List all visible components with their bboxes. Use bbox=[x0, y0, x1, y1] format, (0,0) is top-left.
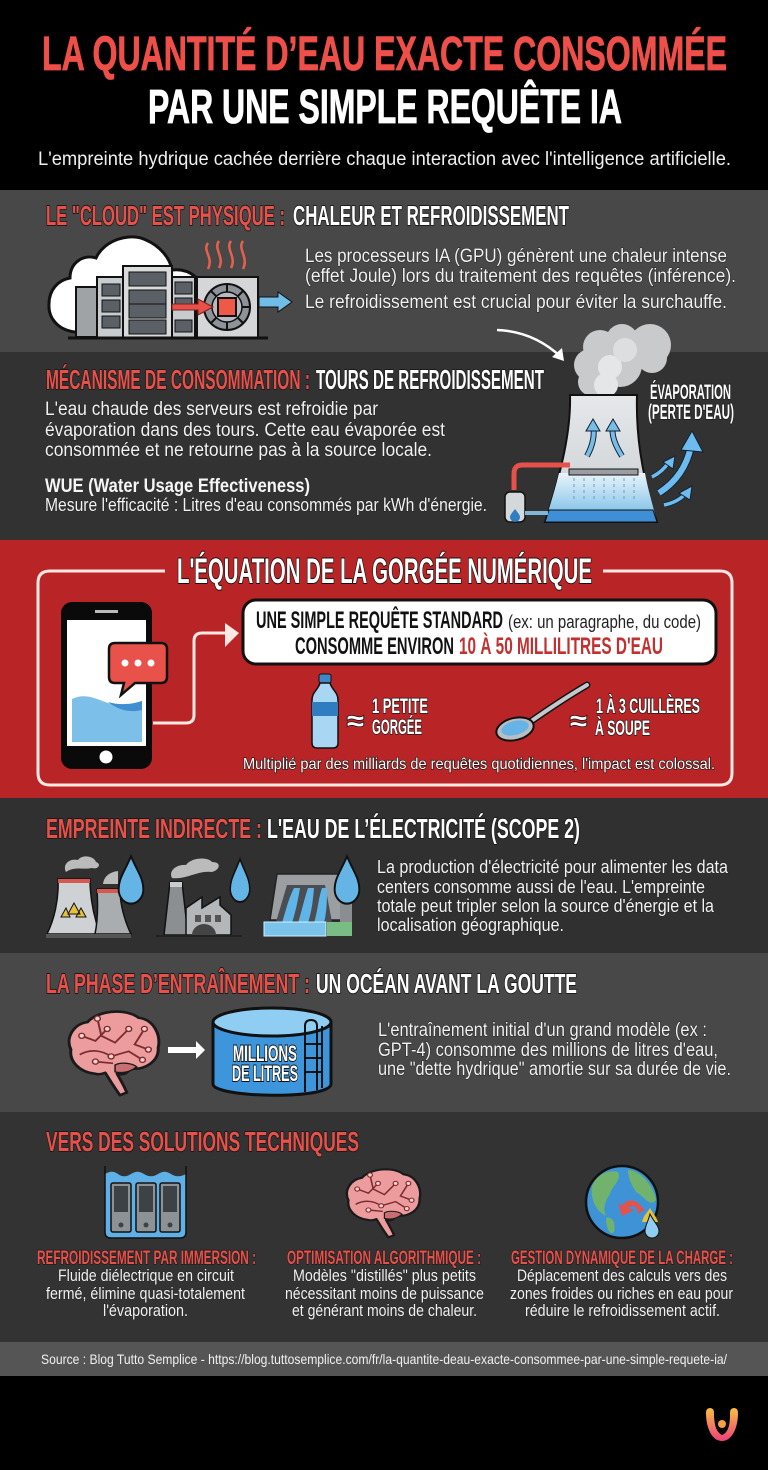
header bbox=[38, 27, 731, 170]
callout: requête standard: UNE SIMPLE REQUÊTE STANDARD bbox=[256, 606, 503, 634]
text: processeurs: (effet Joule) lors du traitement des requêtes (inférence). bbox=[305, 266, 736, 287]
updraft arrows bbox=[586, 419, 622, 456]
text: dette hydrique bbox=[378, 1020, 731, 1080]
callout: requête standard bbox=[243, 600, 716, 664]
heading: entraînement: UN OCÉAN AVANT LA GOUTTE bbox=[316, 968, 577, 999]
text: WUE bbox=[45, 476, 487, 515]
solution: immersion: l'évaporation. bbox=[103, 1301, 188, 1320]
arrow: serveurs vers tour bbox=[497, 330, 564, 361]
text: processeurs: Le refroidissement est crucial pour éviter la surchauffe. bbox=[305, 292, 727, 313]
text: processeurs: Les processeurs IA (GPU) génèrent une chaleur intense bbox=[305, 246, 727, 267]
icon: water tank bbox=[213, 1008, 331, 1095]
heading: empreinte: L'EAU DE L’ÉLECTRICITÉ (SCOPE 2) bbox=[267, 813, 580, 844]
icon: globe bbox=[586, 1166, 659, 1238]
text: production d'électricité: localisation géographique. bbox=[377, 915, 564, 935]
icon: water bottle bbox=[312, 674, 338, 748]
heading: empreinte: EMPREINTE INDIRECTE : bbox=[46, 813, 262, 844]
icon: smartphone bbox=[61, 602, 167, 769]
text: évaporation: consommée et ne retourne pas à la source locale. bbox=[45, 440, 432, 461]
icon: cooling tower bbox=[505, 324, 734, 522]
water tank bbox=[505, 492, 525, 522]
solution: gestion dynamique bbox=[510, 1248, 733, 1320]
smoke bbox=[574, 324, 671, 397]
text: cuillères à soupe: ≈ bbox=[570, 706, 587, 736]
icon: brain bbox=[69, 1012, 159, 1095]
title bbox=[42, 27, 727, 134]
heading: cloud: LE "CLOUD" EST PHYSIQUE : bbox=[46, 200, 285, 231]
text: production d'électricité: La production d'électricité pour alimenter les data bbox=[377, 857, 729, 877]
hot pipe bbox=[514, 465, 570, 490]
panel: phase d'entraînement bbox=[0, 953, 768, 1112]
label: millions de litres: MILLIONS bbox=[233, 1041, 297, 1066]
heading: cloud: CHALEUR ET REFROIDISSEMENT bbox=[293, 200, 569, 231]
text: évaporation: L'eau chaude des serveurs est refroidie par bbox=[45, 399, 379, 420]
icon: nuclear plant bbox=[46, 856, 143, 936]
text: évaporation: évaporation dans des tours. Cette eau évaporée est bbox=[45, 420, 446, 441]
chat bubble bbox=[109, 643, 167, 695]
panel: mécanisme bbox=[0, 352, 768, 540]
source bar bbox=[0, 1342, 768, 1376]
arrow: cerveau vers réservoir bbox=[168, 1041, 205, 1059]
text: WUE: WUE (Water Usage Effectiveness) bbox=[45, 476, 310, 497]
solution: optimisation: OPTIMISATION ALGORITHMIQUE : bbox=[287, 1248, 481, 1269]
label: évaporation bbox=[648, 381, 734, 424]
text: production d'électricité: centers consomme aussi de l'eau. L'empreinte bbox=[377, 877, 705, 897]
solution: optimisation: Modèles "distillés" plus petits bbox=[293, 1266, 476, 1285]
text: production d'électricité bbox=[377, 857, 729, 935]
text: cuillères à soupe: À SOUPE bbox=[595, 717, 650, 740]
solution: optimisation bbox=[285, 1248, 484, 1320]
icon: brain optimisation bbox=[347, 1169, 420, 1237]
heading: mécanisme: TOURS DE REFROIDISSEMENT bbox=[316, 364, 544, 395]
subtitle: L'empreinte hydrique cachée derrière chaque interaction avec l'intelligence artificielle. bbox=[38, 149, 731, 170]
heading: mécanisme: MÉCANISME DE CONSOMMATION : bbox=[46, 364, 310, 395]
panel: solutions techniques bbox=[0, 1112, 768, 1342]
text: cuillères à soupe: 1 À 3 CUILLÈRES bbox=[596, 695, 700, 718]
text: impact colossal: Multiplié par des milliards de requêtes quotidiennes, l'impact est colossal. bbox=[243, 756, 715, 773]
panel: cloud physique bbox=[0, 190, 768, 352]
text: petite gorgée: ≈ bbox=[347, 706, 364, 736]
text: WUE: Mesure l'efficacité : Litres d'eau consommés par kWh d'énergie. bbox=[45, 495, 487, 515]
arrow: téléphone vers requête bbox=[153, 623, 239, 723]
text: petite gorgée: 1 PETITE bbox=[372, 695, 428, 718]
solution: immersion: Fluide diélectrique en circuit bbox=[58, 1266, 234, 1285]
solution: optimisation: et générant moins de chaleur. bbox=[292, 1301, 477, 1320]
icon: immersion cooling bbox=[105, 1166, 186, 1238]
solution: immersion: fermé, élimine quasi-totalement bbox=[46, 1284, 245, 1303]
text: évaporation bbox=[45, 399, 446, 461]
solution: gestion dynamique: Déplacement des calculs vers des bbox=[517, 1266, 727, 1285]
heading: empreinte bbox=[46, 813, 580, 844]
label: millions de litres: DE LITRES bbox=[232, 1061, 298, 1086]
panel: empreinte indirecte bbox=[0, 798, 768, 953]
text: dette hydrique: L'entraînement initial d'un grand modèle (ex : bbox=[378, 1020, 707, 1041]
solution: gestion dynamique: réduire le refroidissement actif. bbox=[525, 1301, 720, 1320]
text: petite gorgée bbox=[347, 695, 428, 739]
label: millions de litres bbox=[232, 1041, 298, 1086]
icon: spoon bbox=[494, 685, 587, 744]
icon: factory bbox=[156, 859, 250, 936]
panel: équation de la gorgée bbox=[0, 540, 768, 798]
text: processeurs bbox=[305, 246, 736, 313]
icon: cloud servers and GPU bbox=[49, 237, 292, 338]
text: production d'électricité: totale peut tripler selon la source d'énergie et la bbox=[377, 896, 715, 916]
frame bbox=[38, 571, 732, 785]
callout: requête standard: CONSOMME ENVIRON bbox=[295, 633, 454, 660]
heading: solutions: VERS DES SOLUTIONS TECHNIQUES bbox=[46, 1126, 359, 1157]
logo bbox=[706, 1408, 738, 1441]
solution: immersion bbox=[37, 1248, 256, 1320]
evaporation arrows bbox=[652, 431, 703, 505]
solution: immersion: REFROIDISSEMENT PAR IMMERSION : bbox=[37, 1248, 256, 1269]
heading: entraînement: LA PHASE D’ENTRAÎNEMENT : bbox=[46, 968, 310, 999]
text: petite gorgée: GORGÉE bbox=[372, 716, 422, 739]
callout: requête standard: (ex: un paragraphe, du code) bbox=[508, 612, 701, 632]
text: dette hydrique: GPT-4) consomme des millions de litres d'eau, bbox=[378, 1040, 718, 1061]
icon: hydro dam bbox=[264, 856, 359, 936]
solution: optimisation: nécessitant moins de puissance bbox=[285, 1284, 484, 1303]
text: cuillères à soupe bbox=[570, 695, 700, 740]
